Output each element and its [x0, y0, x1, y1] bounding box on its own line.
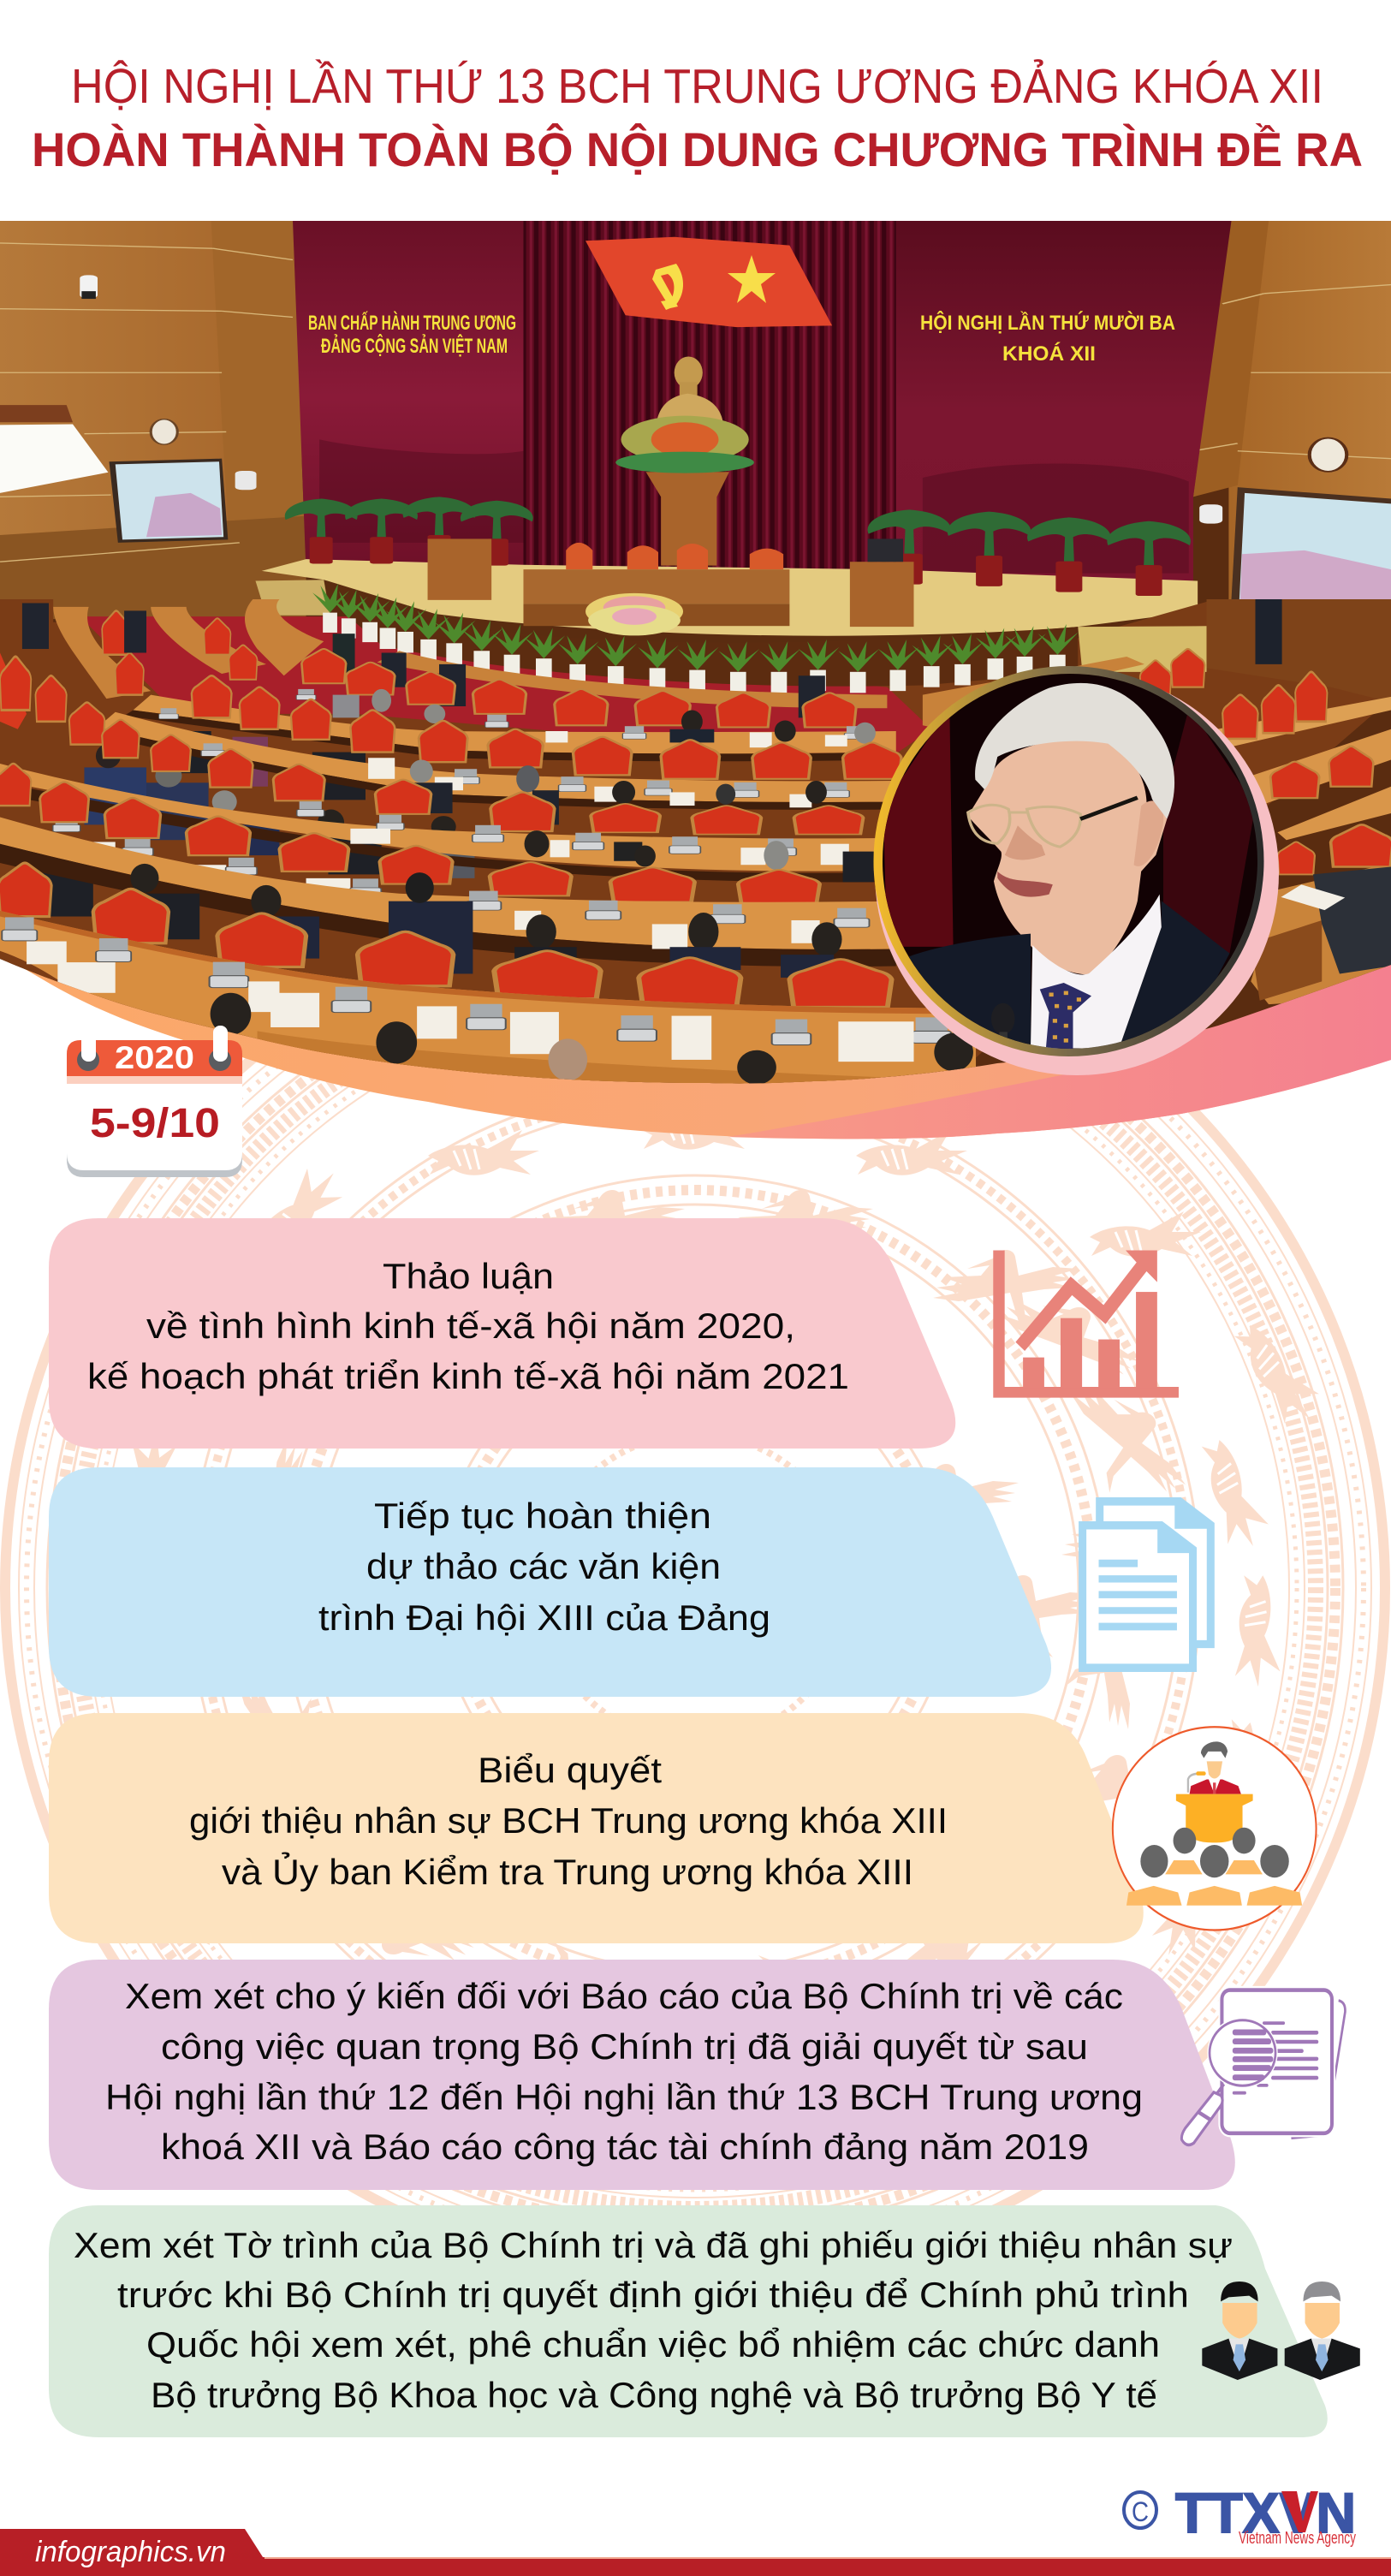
icon: two officials — [1202, 2282, 1360, 2380]
panel text: Biểu quyết — [478, 1750, 662, 1790]
copyright symbol — [1124, 2492, 1156, 2528]
row B chairs — [175, 675, 901, 800]
panel: documents — [49, 1467, 1051, 1697]
calendar date: 5-9/10 — [90, 1101, 220, 1146]
panel: voting — [49, 1713, 1144, 1943]
row D chairs — [0, 764, 820, 917]
panel text — [74, 2225, 1233, 2415]
logo: TTXVN Vietnam News Agency: TTXVN — [1175, 2481, 1356, 2544]
panel text: kế hoạch phát triển kinh tế-xã hội năm 2021 — [87, 1356, 849, 1396]
calendar: 2020, 5-9/10 — [67, 1026, 242, 1177]
panel text — [189, 1750, 948, 1892]
icon: document under magnifier — [1181, 1990, 1345, 2145]
panel text: trước khi Bộ Chính trị quyết định giới thiệu để Chính phủ trình — [117, 2275, 1189, 2315]
curtains — [293, 221, 1232, 599]
front desk row — [0, 911, 976, 1096]
row E chairs — [0, 863, 892, 1007]
floor and wall — [0, 599, 1391, 1134]
yellow wall text left: ĐẢNG CỘNG SẢN VIỆT NAM — [321, 333, 508, 358]
gold ring — [873, 666, 1263, 1056]
right wall details — [1199, 438, 1391, 599]
panel text — [318, 1496, 770, 1638]
panel text: Tiếp tục hoàn thiện — [374, 1496, 711, 1536]
icon: growth chart — [993, 1250, 1179, 1398]
panel: ministers nomination — [49, 2205, 1328, 2437]
panel text: khoá XII và Báo cáo công tác tài chính đảng năm 2019 — [161, 2127, 1089, 2167]
panel text: Bộ trưởng Bộ Khoa học và Công nghệ và Bộ trưởng Bộ Y tế — [151, 2375, 1157, 2415]
panel: political bureau reports — [49, 1960, 1235, 2190]
portrait medallion — [873, 666, 1279, 1075]
yellow wall text right — [920, 311, 1175, 366]
panel text: Xem xét Tờ trình của Bộ Chính trị và đã ghi phiếu giới thiệu nhân sự — [74, 2225, 1233, 2265]
portrait photo — [883, 674, 1257, 1049]
stage floor — [262, 559, 1198, 636]
row A chairs — [301, 634, 856, 728]
top left seats and desks — [0, 599, 324, 729]
conference hall photo — [0, 221, 1391, 1094]
panel text: Xem xét cho ý kiến đối với Báo cáo của Bộ Chính trị về các — [125, 1976, 1123, 2016]
desk row 0 — [377, 651, 887, 708]
panel text: Quốc hội xem xét, phê chuẩn việc bổ nhiệm các chức danh — [146, 2324, 1160, 2365]
yellow wall text right: KHOÁ XII — [1002, 342, 1096, 366]
panel text: Thảo luận — [383, 1256, 554, 1296]
row C chairs — [69, 703, 863, 878]
panel text: giới thiệu nhân sự BCH Trung ương khóa XIII — [189, 1800, 948, 1841]
pink circle backing — [875, 671, 1279, 1075]
copyright symbol: C — [1132, 2496, 1149, 2527]
website label: infographics.vn — [35, 2536, 226, 2568]
flag emblems — [652, 255, 776, 310]
stage plants — [285, 497, 1191, 596]
seating area — [0, 584, 1391, 1134]
desk row 4 — [0, 817, 896, 978]
calendar year: 2020 — [115, 1040, 194, 1075]
yellow wall text right: HỘI NGHỊ LẦN THỨ MƯỜI BA — [920, 311, 1175, 335]
panel text — [105, 1976, 1143, 2167]
panel text: trình Đại hội XIII của Đảng — [318, 1597, 770, 1638]
footer tab — [0, 2529, 265, 2576]
yellow wall text left — [308, 311, 516, 358]
panel text: Hội nghị lần thứ 12 đến Hội nghị lần thứ 13 BCH Trung ương — [105, 2077, 1143, 2117]
bust on pedestal — [615, 356, 754, 566]
panel text: công việc quan trọng Bộ Chính trị đã giải quyết từ sau — [161, 2026, 1088, 2067]
yellow wall text left: BAN CHẤP HÀNH TRUNG ƯƠNG — [308, 311, 516, 335]
curved orange and pink band — [0, 942, 1391, 1139]
title — [32, 58, 1363, 176]
panel text — [87, 1256, 849, 1396]
panel text: dự thảo các văn kiện — [366, 1546, 721, 1586]
icon: documents — [1079, 1497, 1215, 1672]
wood walls — [0, 221, 1391, 619]
footer bar — [0, 2529, 1391, 2576]
left wall details — [0, 275, 257, 543]
calendar body — [67, 1062, 242, 1177]
title line 2: HOÀN THÀNH TOÀN BỘ NỘI DUNG CHƯƠNG TRÌNH ĐỀ RA — [32, 122, 1363, 176]
plant row — [312, 584, 1079, 693]
flag banner — [586, 237, 832, 327]
panel: economic discussion — [49, 1218, 955, 1449]
right bank desks and seats — [923, 599, 1391, 1004]
panel text: về tình hình kinh tế-xã hội năm 2020, — [146, 1306, 795, 1346]
background: bronze drum pattern — [0, 1058, 1390, 2205]
calendar rings — [77, 1026, 231, 1071]
desk row 3 — [0, 764, 878, 883]
desk row 1 — [124, 689, 896, 761]
panel text: và Ủy ban Kiểm tra Trung ương khóa XIII — [222, 1851, 913, 1892]
presidium table — [428, 538, 913, 630]
icon: speaker and audience — [1113, 1727, 1317, 1930]
desk row 2 — [89, 708, 896, 824]
